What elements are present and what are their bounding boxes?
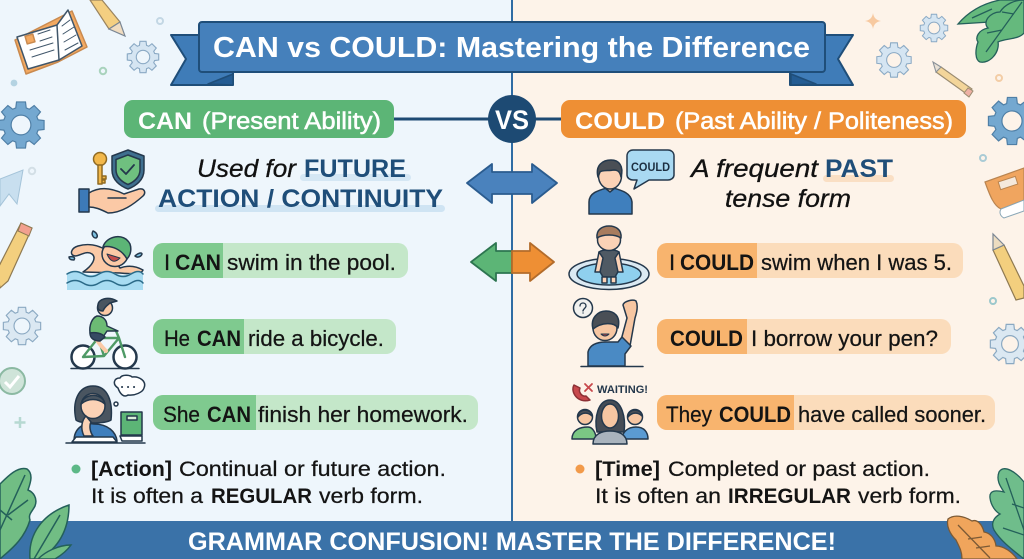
heading: COULD: (Past Ability / Politeness) — [675, 108, 953, 135]
icon: gear lower right — [990, 324, 1024, 364]
sentence: I could swim: swim when I was 5. — [761, 250, 952, 275]
heading: CAN: CAN — [138, 108, 192, 135]
sentence: Could I borrow: COULD — [670, 326, 743, 351]
icon: small gear top left — [127, 41, 159, 73]
sentence: They could have called — [657, 395, 995, 430]
sentence: He can ride: He — [164, 326, 190, 351]
note: CAN action: [Action] — [91, 458, 172, 481]
icon: child in paddling pool — [569, 226, 649, 290]
note: CAN action: REGULAR — [211, 485, 312, 508]
sentence: He can ride — [153, 319, 396, 354]
sentence: He can ride: ride a bicycle. — [248, 326, 384, 351]
sentence: I could swim: I — [669, 250, 675, 275]
left ribbon tail — [171, 35, 233, 85]
icon: gear top right — [877, 43, 911, 77]
icon: pencil top right — [933, 62, 973, 97]
note: CAN action: It is often a — [91, 485, 203, 508]
note: COULD time: [Time] — [595, 458, 660, 481]
heading: COULD: COULD — [575, 108, 665, 135]
VS badge: VS — [495, 105, 529, 135]
text: used for future action: ACTION / CONTINUITY — [158, 185, 443, 213]
text: used for future action — [155, 155, 445, 213]
text: used for future action: FUTURE — [304, 155, 406, 183]
sentence: He can ride: CAN — [197, 326, 241, 351]
heading: CAN — [124, 100, 394, 138]
icon: leaves bottom left — [0, 468, 71, 559]
icon: boy raising hand — [574, 298, 643, 366]
icon: sparkle — [865, 13, 881, 29]
centre divider — [511, 0, 513, 522]
icon: person with COULD bubble: COULD — [631, 160, 670, 174]
text: a frequent past: PAST — [825, 155, 893, 183]
sentence: They could have called: have called sooner. — [798, 402, 986, 427]
left tail fold — [208, 74, 233, 85]
VS badge — [488, 95, 536, 143]
decorative dots left top — [11, 18, 163, 174]
heading: CAN: (Present Ability) — [202, 108, 381, 135]
decorative dots right — [980, 75, 1002, 304]
right tail fold — [791, 74, 816, 85]
note: CAN action — [72, 458, 446, 508]
icon: gear right — [988, 97, 1024, 145]
sentence: They could have called: COULD — [719, 402, 791, 427]
sentence: Could I borrow — [657, 319, 951, 354]
note: COULD time: Completed or past action. — [668, 458, 930, 481]
icon: gear left — [0, 102, 44, 148]
icon: cyclist — [71, 298, 139, 368]
icon: pencil right — [993, 234, 1024, 300]
icon: leaves bottom right — [947, 469, 1024, 559]
icon: swimmer — [67, 231, 143, 290]
connector line — [394, 118, 569, 120]
background: left panel — [0, 0, 512, 559]
sentence: She can finish: She — [163, 402, 200, 427]
sentence: I can swim: CAN — [175, 250, 221, 275]
icon: key, shield and hand — [79, 150, 145, 213]
icon: pencil left — [0, 223, 32, 288]
icon: girl doing homework — [66, 375, 145, 443]
icon: group waiting for a call: WAITING! — [597, 384, 648, 396]
title text: CAN vs COULD: Mastering the Difference — [213, 32, 810, 64]
arrow: green and orange double arrow — [471, 243, 554, 281]
text: a frequent past: A frequent — [689, 155, 819, 183]
note: COULD time: verb form. — [858, 485, 961, 508]
sentence: I can swim: I — [164, 250, 170, 275]
note: COULD time — [576, 458, 961, 508]
sentence: They could have called: They — [666, 402, 712, 427]
icon: pencil top left — [90, 0, 125, 36]
note: CAN action: verb form. — [319, 485, 423, 508]
title ribbon — [171, 22, 853, 85]
icon: check badge — [0, 368, 25, 394]
text: used for future action: Used for — [197, 155, 298, 183]
icon: plus — [14, 417, 26, 428]
ribbon body — [199, 22, 825, 72]
icon: leaves top right — [958, 0, 1024, 62]
background: right panel — [512, 0, 1024, 559]
icon: person with COULD bubble — [589, 150, 674, 214]
text: a frequent past: tense form — [725, 185, 851, 213]
arrow: blue double arrow — [467, 164, 557, 203]
sentence: I could swim — [657, 243, 963, 278]
highlight marks — [300, 174, 411, 181]
bottom banner: GRAMMAR CONFUSION! MASTER THE DIFFERENCE! — [188, 528, 836, 556]
sentence: She can finish: CAN — [207, 402, 251, 427]
text: a frequent past — [689, 155, 894, 213]
sentence: She can finish: finish her homework. — [258, 402, 468, 427]
sentence: I can swim: swim in the pool. — [227, 250, 396, 275]
icon: open book — [15, 10, 87, 74]
right ribbon tail — [790, 35, 853, 85]
sentence: I could swim: COULD — [680, 250, 754, 275]
icon: notebook right — [985, 168, 1024, 218]
bottom banner — [0, 521, 1024, 559]
note: COULD time: It is often an — [595, 485, 721, 508]
icon: group waiting for a call — [572, 384, 648, 444]
icon: gear top right small — [920, 14, 948, 42]
sentence: I can swim — [153, 243, 408, 278]
note: CAN action: Continual or future action. — [179, 458, 446, 481]
icon: paper plane — [0, 170, 23, 206]
icon: gear lower left — [3, 307, 41, 345]
sentence: Could I borrow: I borrow your pen? — [751, 326, 938, 351]
heading: COULD — [561, 100, 966, 138]
sentence: She can finish — [153, 395, 478, 430]
note: COULD time: IRREGULAR — [728, 485, 851, 508]
highlight mark — [823, 175, 894, 182]
